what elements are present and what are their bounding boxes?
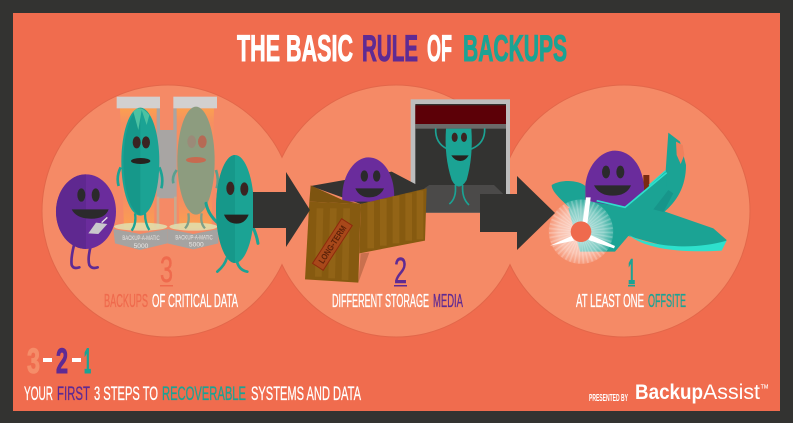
- step 1 label: OFFSITE: [648, 291, 686, 311]
- machine labels: 5000: [134, 243, 149, 250]
- step 2 label: MEDIA: [433, 291, 463, 311]
- panel: step 3 backups illustration: [56, 97, 258, 272]
- step 3 label: [104, 249, 238, 311]
- propeller: [549, 197, 615, 264]
- machine labels: BACKUP-A-MATIC: [122, 235, 160, 242]
- ghost copy character: [173, 107, 218, 228]
- footer tagline: SYSTEMS AND DATA: [251, 383, 361, 405]
- step 2 label: DIFFERENT STORAGE: [332, 291, 429, 311]
- footer tagline: YOUR: [24, 383, 53, 405]
- step 3 label: 3: [160, 249, 173, 290]
- title: RULE: [362, 28, 418, 69]
- 3-2-1 heading: 2: [56, 342, 68, 381]
- title: THE BASIC: [237, 28, 353, 69]
- footer tagline: [24, 383, 361, 405]
- infographic: 1: [84, 342, 91, 381]
- storage room: [411, 99, 510, 213]
- BackupAssist logo: Backup: [635, 381, 703, 404]
- machine labels: [122, 234, 213, 250]
- crate back: [311, 172, 427, 204]
- step 2 label: [332, 250, 463, 311]
- BackupAssist logo: Assist: [703, 381, 760, 404]
- BackupAssist logo: [589, 381, 769, 404]
- teal character in machine: [118, 108, 162, 231]
- arrow: step 2 to step 1: [480, 176, 555, 250]
- teal character outside machine: [206, 155, 258, 272]
- footer tagline: FIRST: [57, 383, 90, 405]
- BackupAssist logo: ™: [760, 383, 769, 395]
- panel: step 2 storage media illustration: [305, 99, 510, 283]
- step 1 label: [576, 251, 686, 311]
- title: [237, 28, 567, 69]
- three overlapping circles: [42, 84, 750, 338]
- long-term stamp: LONG-TERM: [316, 224, 348, 265]
- title: OF: [427, 28, 452, 69]
- step 1 label: 1: [628, 251, 635, 292]
- step 3 label: OF CRITICAL DATA: [152, 291, 238, 311]
- 3-2-1 heading: [27, 342, 91, 381]
- arrow: step 3 to step 2: [253, 172, 310, 247]
- machine labels: 5000: [189, 241, 204, 248]
- 3-2-1 heading: 3: [27, 342, 40, 381]
- panel: step 1 offsite plane illustration: [549, 133, 727, 264]
- crate: [305, 185, 427, 283]
- step 2 label: 2: [394, 250, 407, 291]
- purple character with tablet: [56, 174, 116, 268]
- backup machines: [113, 97, 218, 250]
- title: BACKUPS: [463, 28, 567, 69]
- teal character in room: [436, 128, 485, 205]
- step 1 label: AT LEAST ONE: [576, 291, 644, 311]
- plane: [552, 133, 727, 252]
- purple pilot: [585, 151, 649, 208]
- BackupAssist logo: PRESENTED BY: [589, 392, 628, 404]
- step 3 label: BACKUPS: [104, 291, 148, 311]
- footer tagline: RECOVERABLE: [162, 383, 246, 405]
- machine labels: BACKUP-A-MATIC: [175, 234, 213, 241]
- footer tagline: 3 STEPS TO: [94, 383, 158, 405]
- purple character in crate: [342, 157, 394, 202]
